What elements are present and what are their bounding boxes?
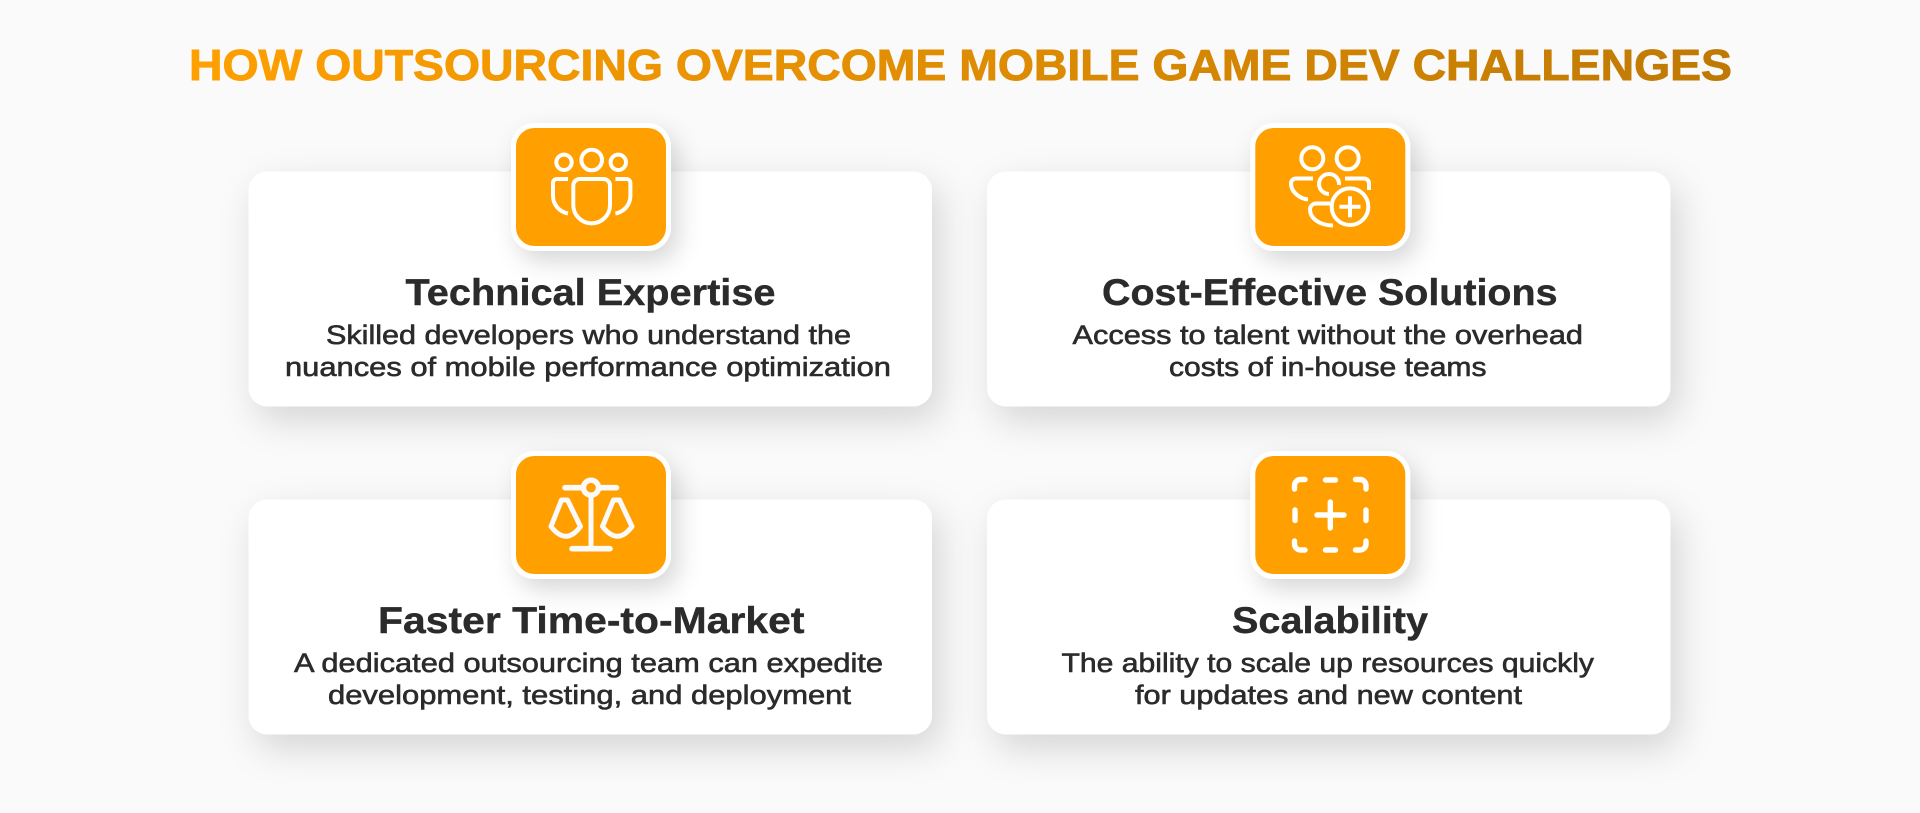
icon badge bbox=[1253, 126, 1408, 248]
panel: cost-effective solutions bbox=[987, 126, 1670, 406]
description: Access to talent without the overhead bbox=[1072, 320, 1583, 350]
description bbox=[285, 320, 891, 382]
description: A dedicated outsourcing team can expedite bbox=[294, 648, 883, 678]
description: development, testing, and deployment bbox=[328, 680, 852, 710]
panel: faster time-to-market bbox=[248, 454, 932, 734]
icon badge bbox=[1253, 454, 1408, 576]
icon badge bbox=[514, 126, 668, 248]
heading: Faster Time-to-Market bbox=[378, 600, 804, 641]
icon: balance scale bbox=[551, 480, 632, 549]
heading: Technical Expertise bbox=[406, 272, 776, 313]
description bbox=[1062, 648, 1595, 710]
icon: dashed frame with plus bbox=[1294, 480, 1366, 550]
description: for updates and new content bbox=[1135, 680, 1523, 710]
heading: Scalability bbox=[1232, 600, 1428, 641]
description: nuances of mobile performance optimization bbox=[285, 352, 891, 382]
icon: add people bbox=[1291, 147, 1369, 226]
card background bbox=[248, 172, 932, 406]
description: Skilled developers who understand the bbox=[326, 320, 851, 350]
title: HOW OUTSOURCING OVERCOME MOBILE GAME DEV CHALLENGES bbox=[189, 41, 1732, 90]
panel: technical expertise bbox=[248, 126, 932, 406]
heading: Cost-Effective Solutions bbox=[1102, 272, 1558, 313]
description bbox=[1072, 320, 1583, 382]
card background bbox=[987, 500, 1670, 734]
panel: scalability bbox=[987, 454, 1670, 734]
description: The ability to scale up resources quickly bbox=[1062, 648, 1595, 678]
description bbox=[294, 648, 883, 710]
card background bbox=[248, 500, 932, 734]
card background bbox=[987, 172, 1670, 406]
icon badge bbox=[514, 454, 668, 576]
icon: team bbox=[553, 150, 630, 223]
description: costs of in-house teams bbox=[1169, 352, 1486, 382]
